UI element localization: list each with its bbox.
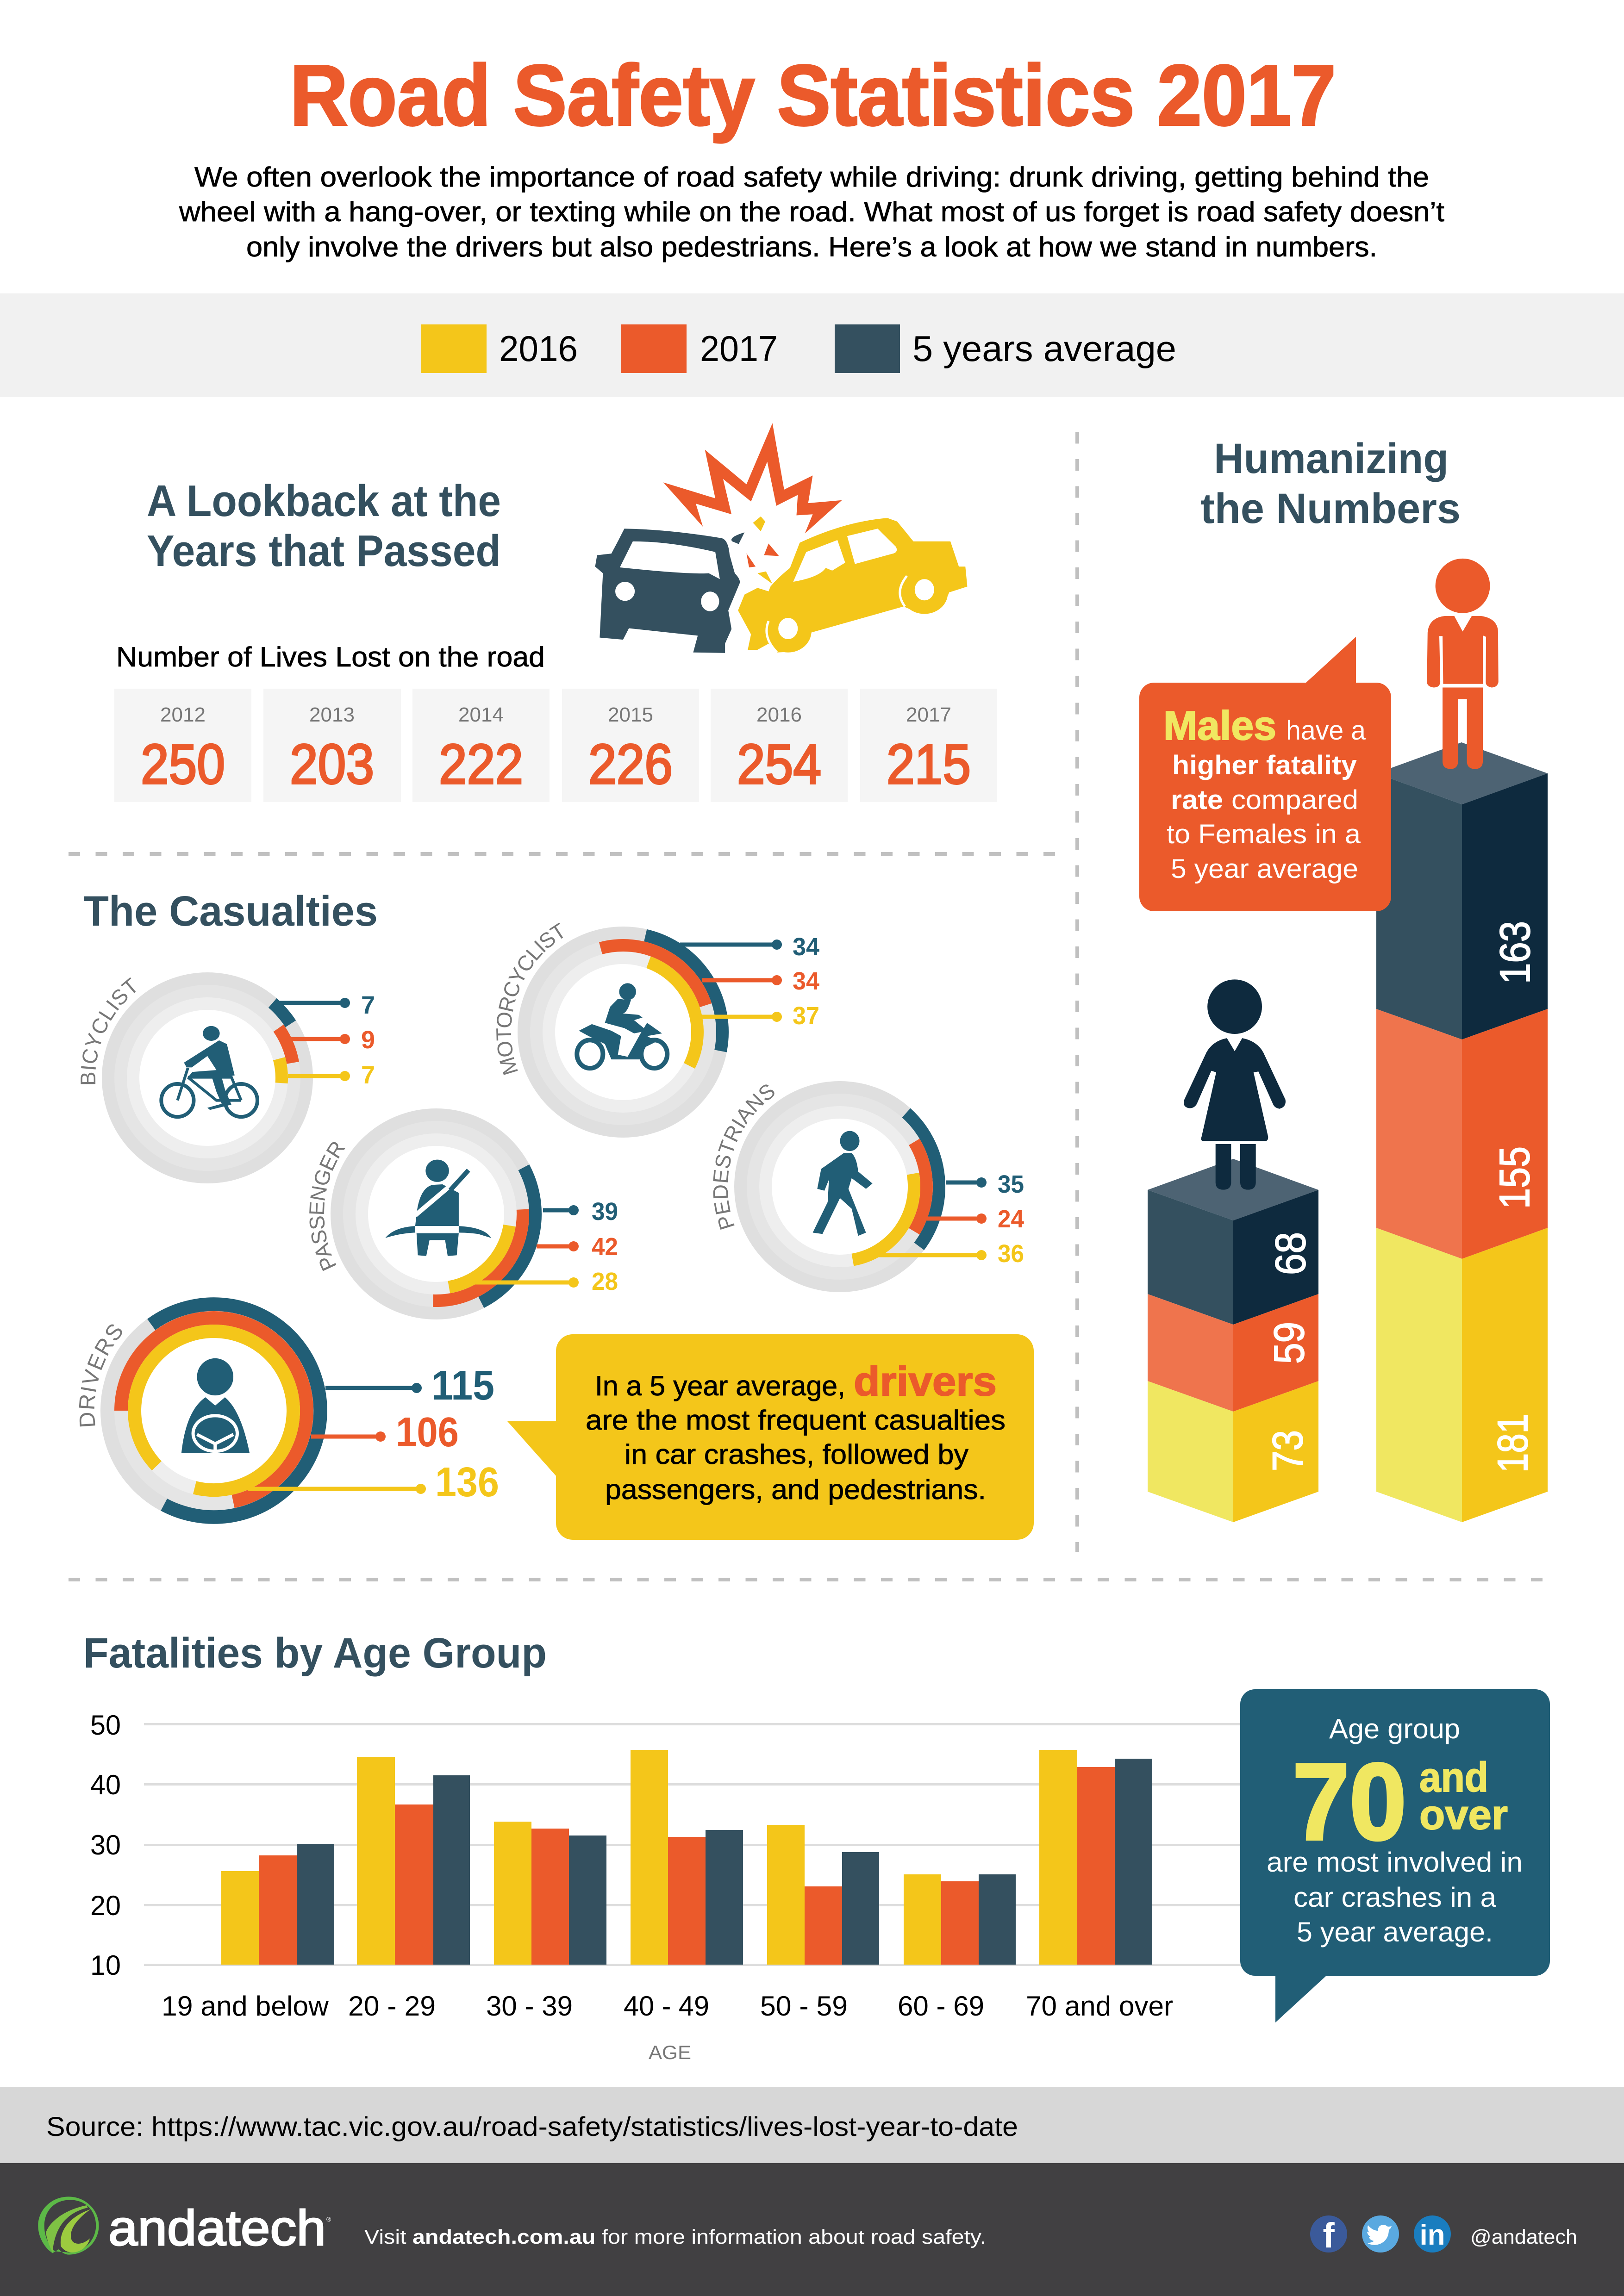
donut: passenger: 39	[592, 1198, 618, 1226]
callout: age group: car crashes in a	[1293, 1882, 1497, 1913]
bar chart: 20	[90, 1890, 121, 1921]
callout: drivers: are the most frequent casualties	[586, 1405, 1006, 1436]
donut: pedestrians: 35	[998, 1170, 1024, 1198]
icon: male figure	[1427, 559, 1499, 769]
callout: drivers: In a 5 year average,	[595, 1370, 845, 1401]
bar chart: 40 - 49	[624, 1991, 709, 2022]
donut: pedestrians: 36	[998, 1240, 1024, 1268]
footer text: Visit andatech.com.au for more information about road safety.	[364, 2226, 986, 2248]
bar chart: 70 and over	[1026, 1991, 1173, 2022]
source bar	[0, 2087, 1624, 2163]
stat cards: lives lost per year: 2015	[608, 703, 653, 726]
stat cards: lives lost per year: 203	[290, 733, 374, 796]
social handle: @andatech	[1470, 2226, 1577, 2248]
donut: motorcyclist: 37	[793, 1002, 819, 1030]
callout: drivers: drivers	[854, 1358, 997, 1404]
callout: age group: 70	[1293, 1741, 1406, 1862]
legend	[0, 293, 1624, 397]
icon: female figure	[1184, 979, 1286, 1190]
bar chart: 40	[90, 1769, 121, 1800]
stat cards: lives lost per year: 254	[737, 733, 821, 796]
stacked column: females: 68	[1267, 1232, 1314, 1275]
stat cards: lives lost per year: 2016	[756, 703, 802, 726]
intro text: only involve the drivers but also pedestrians. Here’s a look at how we stand in numbers.	[246, 231, 1377, 262]
intro text	[179, 162, 1444, 262]
donut: motorcyclist	[492, 913, 819, 1151]
callout: males: rate	[1171, 785, 1223, 815]
bar chart: 30 - 39	[486, 1991, 573, 2022]
callout: age group: Age group	[1329, 1713, 1460, 1744]
stacked column: males: 155	[1491, 1146, 1538, 1209]
donut: drivers: 115	[431, 1363, 494, 1409]
heading: humanizing: Humanizing	[1214, 435, 1449, 482]
callout: males: Males	[1163, 703, 1276, 748]
callout: males: to Females in a	[1167, 819, 1361, 849]
icon: twitter	[1362, 2215, 1399, 2252]
callout: drivers: passengers, and pedestrians.	[605, 1474, 986, 1505]
callout: males: compared	[1231, 785, 1358, 815]
donut: drivers: 136	[435, 1459, 499, 1506]
icon: bicycle	[161, 1026, 257, 1117]
icon: linkedin	[1414, 2215, 1451, 2252]
stacked column: males	[1376, 742, 1548, 1522]
icon: linkedin: in	[1419, 2219, 1445, 2251]
stat cards: lives lost per year: 2013	[309, 703, 355, 726]
donut: bicyclist	[67, 938, 375, 1218]
title: Road Safety Statistics 2017	[290, 48, 1336, 143]
bar chart	[90, 1710, 1242, 2063]
icon: motorcycle	[577, 983, 667, 1068]
heading: humanizing: the Numbers	[1200, 485, 1461, 532]
donut: pedestrians: PEDESTRIANS	[708, 1078, 780, 1233]
intro text: wheel with a hang-over, or texting while on the road. What most of us forget is road safety doesn’t	[179, 196, 1444, 227]
callout: drivers	[507, 1334, 1034, 1540]
legend: 5 years average	[912, 328, 1176, 369]
stacked column: males: 163	[1492, 921, 1539, 984]
stat cards: lives lost per year: 250	[141, 733, 225, 796]
panel: casualties	[65, 888, 1034, 1559]
icon: facebook	[1310, 2215, 1347, 2255]
stacked column: females: 59	[1266, 1322, 1313, 1364]
logo: andatech: ®	[326, 2215, 331, 2223]
icon: driver with steering wheel	[181, 1358, 250, 1453]
donut: motorcyclist: MOTORCYCLIST	[492, 918, 570, 1078]
callout: age group: are most involved in	[1267, 1847, 1523, 1878]
bar chart: 50 - 59	[760, 1991, 848, 2022]
donut: bicyclist: 9	[361, 1026, 375, 1054]
donut: passenger	[302, 1080, 618, 1348]
logo: andatech: andatech	[108, 2200, 326, 2256]
stat cards: lives lost per year: 222	[439, 733, 523, 796]
logo: andatech	[38, 2196, 331, 2256]
donut: passenger: PASSENGER	[305, 1137, 350, 1275]
callout: males: higher fatality	[1172, 750, 1357, 780]
lives lost label: Number of Lives Lost on the road	[116, 641, 545, 672]
panel: fatalities by age group	[83, 1630, 1550, 2063]
donut: passenger: 28	[592, 1268, 618, 1295]
donut: bicyclist: BICYCLIST	[76, 973, 143, 1086]
stacked column: females	[1148, 1159, 1318, 1522]
stat cards: lives lost per year	[114, 689, 997, 802]
bar chart: 10	[90, 1950, 121, 1981]
stacked column: females: 73	[1264, 1430, 1312, 1471]
heading: humanizing	[1200, 435, 1461, 532]
stat cards: lives lost per year: 226	[588, 733, 673, 796]
heading: lookback: A Lookback at the	[147, 476, 501, 526]
bar chart: 30	[90, 1829, 121, 1860]
footer	[0, 2163, 1624, 2296]
heading: lookback	[147, 476, 501, 576]
donut: bicyclist: 7	[361, 1061, 375, 1089]
callout: males: 5 year average	[1171, 854, 1358, 884]
stat cards: lives lost per year: 2014	[458, 703, 504, 726]
bar chart: 50	[90, 1710, 121, 1741]
bar chart: 20 - 29	[348, 1991, 436, 2022]
bar chart: 19 and below	[162, 1991, 329, 2022]
stacked column: males: 181	[1489, 1414, 1537, 1473]
source bar: Source: https://www.tac.vic.gov.au/road-safety/statistics/lives-lost-year-to-date	[46, 2112, 1018, 2142]
callout: males: have a	[1286, 716, 1366, 746]
callout: age group: over	[1419, 1792, 1508, 1838]
callout: males	[1139, 637, 1391, 911]
panel: humanizing the numbers	[1139, 435, 1548, 1522]
icon: car crash	[595, 423, 967, 653]
callout: age group: and	[1419, 1755, 1488, 1801]
donut: pedestrians: 24	[998, 1205, 1024, 1233]
intro text: We often overlook the importance of road safety while driving: drunk driving, getting behind the	[194, 162, 1429, 193]
donut: pedestrians	[700, 1046, 1024, 1327]
donut: drivers	[65, 1262, 499, 1559]
heading: casualties: The Casualties	[83, 888, 378, 935]
donut: passenger: 42	[592, 1233, 618, 1261]
icon: pedestrian	[813, 1131, 873, 1236]
stat cards: lives lost per year: 2012	[160, 703, 206, 726]
stat cards: lives lost per year: 215	[887, 733, 971, 796]
callout: age group: 5 year average.	[1297, 1916, 1493, 1948]
stat cards: lives lost per year: 2017	[906, 703, 951, 726]
legend: 2017	[700, 328, 778, 369]
bar chart: AGE	[649, 2041, 691, 2063]
donut: bicyclist: 7	[361, 991, 375, 1019]
callout: drivers: in car crashes, followed by	[625, 1439, 968, 1470]
bar chart: 60 - 69	[898, 1991, 984, 2022]
donut: drivers: 106	[396, 1409, 459, 1456]
icon: facebook: f	[1323, 2216, 1335, 2255]
heading: lookback: Years that Passed	[147, 526, 501, 576]
heading: fatalities: Fatalities by Age Group	[83, 1630, 547, 1677]
donut: drivers: DRIVERS	[75, 1319, 129, 1429]
icon: seatbelt passenger	[385, 1160, 491, 1256]
legend: 2016	[499, 328, 578, 369]
panel: lookback	[114, 423, 997, 802]
callout: age group	[1240, 1689, 1550, 2022]
donut: motorcyclist: 34	[793, 967, 819, 995]
donut: motorcyclist: 34	[793, 933, 819, 961]
